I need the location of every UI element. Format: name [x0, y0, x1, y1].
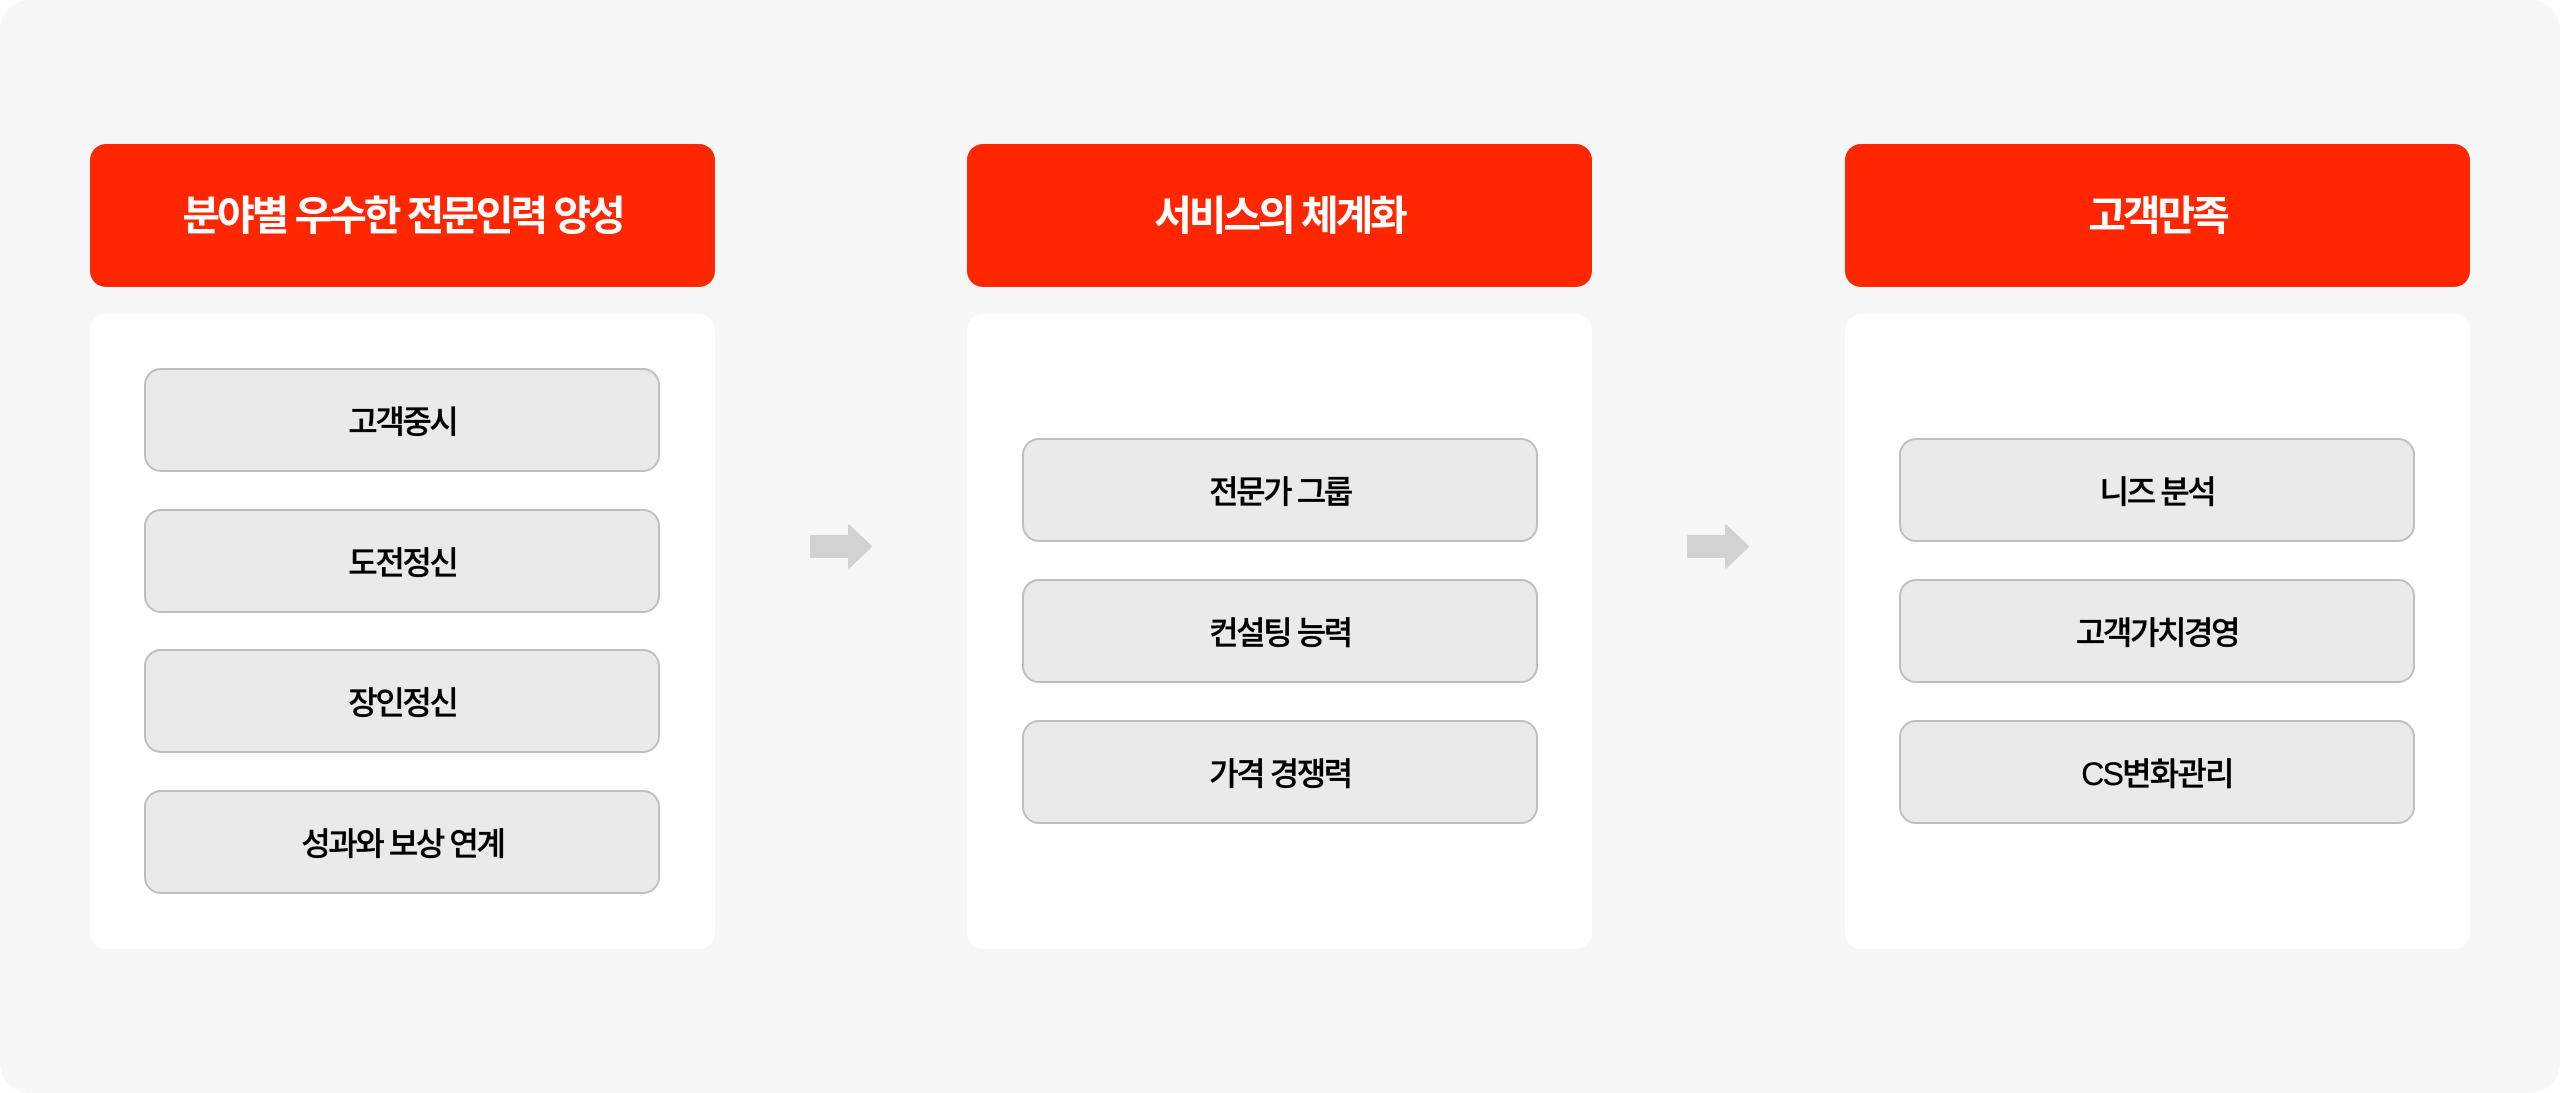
panel: column 3 list	[1845, 314, 2470, 949]
item: 고객중시	[144, 368, 660, 472]
column 2 header: 서비스의 체계화	[1154, 193, 1405, 239]
item: 장인정신	[144, 649, 660, 753]
item: 도전정신	[144, 509, 660, 613]
item: CS변화관리	[1899, 720, 2415, 824]
item: 니즈 분석: 니즈 분석	[2100, 474, 2214, 510]
item: 컨설팅 능력	[1022, 579, 1538, 683]
column 1 header	[90, 144, 715, 287]
item: 전문가 그룹	[1022, 438, 1538, 542]
item: 장인정신: 장인정신	[348, 685, 456, 721]
item: 고객중시: 고객중시	[348, 404, 456, 440]
item: 전문가 그룹: 전문가 그룹	[1209, 474, 1351, 510]
item: 성과와 보상 연계: 성과와 보상 연계	[301, 826, 504, 862]
item: 컨설팅 능력: 컨설팅 능력	[1209, 615, 1351, 651]
item: 고객가치경영: 고객가치경영	[2076, 615, 2238, 651]
arrow 2	[1687, 524, 1750, 568]
item: 성과와 보상 연계	[144, 790, 660, 894]
column 3 header: 고객만족	[2088, 193, 2227, 239]
panel: column 1 list	[90, 314, 715, 949]
column 1 header: 분야별 우수한 전문인력 양성	[182, 193, 623, 239]
item: 니즈 분석	[1899, 438, 2415, 542]
item: CS변화관리: CS변화관리	[2081, 756, 2233, 792]
panel: column 2 list	[967, 314, 1592, 949]
item: 가격 경쟁력	[1022, 720, 1538, 824]
column 2 header	[967, 144, 1592, 287]
item: 도전정신: 도전정신	[348, 545, 456, 581]
item: 가격 경쟁력: 가격 경쟁력	[1209, 756, 1351, 792]
item: 고객가치경영	[1899, 579, 2415, 683]
arrow 1	[810, 524, 872, 568]
column 3 header	[1845, 144, 2470, 287]
